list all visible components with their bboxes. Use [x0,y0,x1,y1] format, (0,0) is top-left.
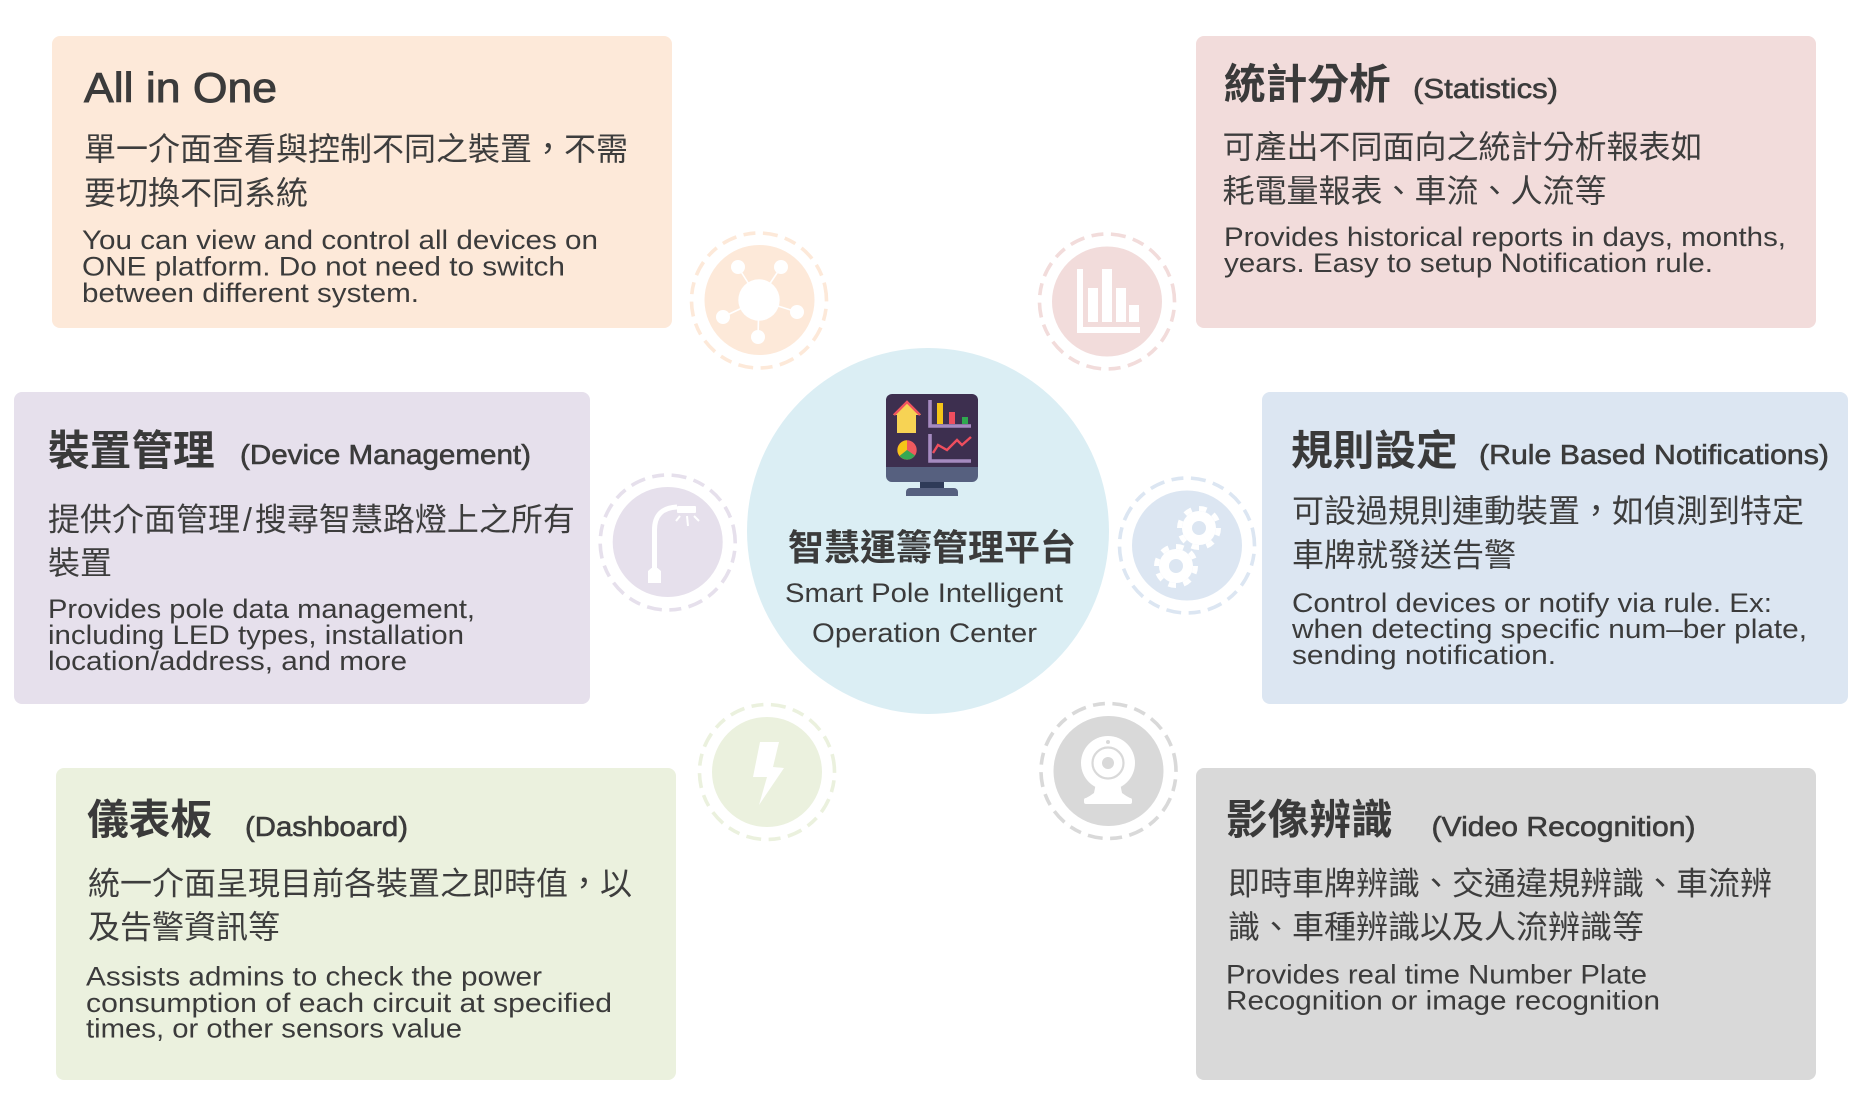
text block: Statistics Chinese [1222,129,1703,209]
heading: Statistics: (Statistics) [1413,73,1558,104]
text block: platform English: Smart Pole Intelligent [785,578,1064,608]
text block: Dashboard English: consumption of each circuit at specified [86,988,612,1018]
heading: platform title: 智慧運籌管理平台 [788,527,1076,568]
text block: Rule English [1291,588,1807,670]
panel: Dashboard [56,768,676,1080]
text block: All in One English [82,225,598,308]
heading: Video Recognition [1226,796,1696,843]
panel: All in One [52,36,672,328]
heading: Dashboard: (Dashboard) [245,811,408,842]
center circle [747,348,1109,714]
icon: gears [1107,465,1267,626]
text block: All in One English: between different system. [82,278,419,308]
heading: Dashboard [87,796,408,843]
text block: All in One English: ONE platform. Do not need to switch [82,252,565,282]
heading: Video Recognition: (Video Recognition) [1432,811,1696,842]
panel: Device Management [14,392,590,704]
text block: Device Management Chinese: 裝置 [48,545,112,581]
text block: Video English [1226,960,1660,1016]
heading: Statistics: 統計分析 [1224,60,1391,108]
text block: Video English: Recognition or image recognition [1226,986,1660,1016]
heading: Dashboard: 儀表板 [87,796,212,843]
panel: Statistics [1196,36,1816,328]
heading: All in One: All in One [84,64,277,111]
text block: Device Management English: Provides pole data management, [48,594,475,624]
text block: Rule English: Control devices or notify via rule. Ex: [1292,588,1772,618]
text block: All in One Chinese: 要切換不同系統 [84,175,308,211]
heading: Device Management [48,427,531,474]
heading: Device Management: 裝置管理 [48,427,215,474]
heading: Device Management: (Device Management) [240,439,531,470]
text block: Video Chinese [1228,866,1772,945]
text block: Rule Chinese [1292,493,1804,573]
text block: Device Management Chinese [48,502,575,581]
text block: Statistics English: years. Easy to setup Notification rule. [1224,248,1713,278]
text block: Device Management English: location/address, and more [48,646,407,676]
text block: Dashboard English [86,962,612,1044]
icon: street lamp [588,462,748,623]
icon: bar chart [1027,221,1187,382]
heading: Rule Based Notifications: (Rule Based Notifications) [1479,439,1829,470]
text block: Statistics Chinese: 可產出不同面向之統計分析報表如 [1222,129,1703,165]
text block: Rule English: sending notification. [1292,640,1556,670]
text block: platform English: Operation Center [812,618,1037,648]
text block: Statistics English: Provides historical reports in days, months, [1224,222,1786,252]
icon: lightning bolt [687,692,847,852]
text block: Statistics English [1224,222,1786,278]
text block: Video Chinese: 識、車種辨識以及人流辨識等 [1228,909,1644,945]
panel: Rule Based Notifications [1262,392,1848,704]
icon: network hub [679,220,839,381]
text block: Dashboard English: times, or other sensors value [86,1014,462,1044]
text block: Dashboard Chinese: 及告警資訊等 [88,909,280,945]
text block: Video English: Provides real time Number Plate [1226,960,1647,990]
panel: Video Recognition [1196,768,1816,1080]
heading: Statistics [1224,60,1558,108]
heading: Rule Based Notifications: 規則設定 [1291,427,1458,474]
text block: platform English [785,578,1064,648]
text block: All in One Chinese [84,131,628,211]
icon: webcam [1028,691,1189,851]
heading: Rule Based Notifications [1291,427,1829,474]
text block: Device Management Chinese: 提供介面管理/搜尋智慧路燈上之所有 [48,502,575,538]
text block: Device Management English: including LED types, installation [48,620,464,650]
text block: Dashboard Chinese [88,866,632,945]
icon: monitor dashboard [886,394,978,496]
text block: All in One Chinese: 單一介面查看與控制不同之裝置，不需 [84,131,628,167]
text block: Rule English: when detecting specific num–ber plate, [1291,614,1807,644]
heading: Video Recognition: 影像辨識 [1226,796,1393,843]
text block: Device Management English [48,594,475,676]
text block: All in One English: You can view and control all devices on [82,225,598,255]
text block: Rule Chinese: 可設過規則連動裝置，如偵測到特定 [1292,493,1804,529]
text block: Statistics Chinese: 耗電量報表、車流、人流等 [1222,173,1607,209]
text block: Video Chinese: 即時車牌辨識、交通違規辨識、車流辨 [1228,866,1772,902]
text block: Dashboard Chinese: 統一介面呈現目前各裝置之即時值，以 [88,866,632,902]
text block: Rule Chinese: 車牌就發送告警 [1292,537,1516,573]
text block: Dashboard English: Assists admins to check the power [86,962,542,992]
